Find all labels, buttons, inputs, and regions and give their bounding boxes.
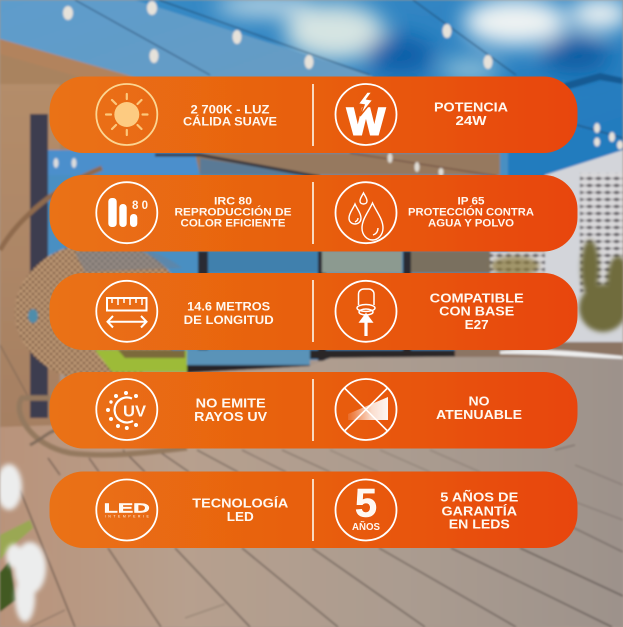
text: colour rendering bbox=[174, 195, 292, 230]
house wall and eave bbox=[0, 39, 497, 444]
text: no UV bbox=[194, 397, 268, 424]
text: ingress protection: PROTECCIÓN CONTRA bbox=[408, 206, 534, 219]
text: E27 compatibility: CON BASE bbox=[439, 304, 515, 319]
text: E27 compatibility: E27 bbox=[465, 317, 489, 332]
icon: E27 bulb base bbox=[336, 281, 396, 342]
icon: not dimmable bbox=[336, 379, 396, 440]
icon: LED: INTEMPERIE bbox=[105, 514, 149, 518]
panel: row 2 bbox=[50, 175, 578, 252]
panel: row 1 bbox=[50, 76, 578, 153]
text: LED technology: TECNOLOGÍA bbox=[192, 496, 288, 511]
sky canopy bbox=[0, 0, 623, 175]
text: colour temperature bbox=[183, 104, 277, 128]
text: colour temperature: CÁLIDA SUAVE bbox=[183, 116, 277, 128]
icon: LED bbox=[96, 480, 157, 540]
text: no UV: NO EMITE bbox=[196, 397, 266, 411]
divider bbox=[312, 280, 314, 342]
text: LED technology bbox=[192, 496, 288, 524]
text: colour temperature: 2 700K - LUZ bbox=[190, 104, 270, 116]
panel: row 4 bbox=[50, 372, 578, 448]
text: not dimmable bbox=[436, 395, 522, 422]
window with blue glass bbox=[30, 114, 508, 418]
text: not dimmable: NO bbox=[468, 395, 490, 409]
text: ingress protection bbox=[408, 195, 534, 230]
icon: 5 year warranty: AÑOS bbox=[352, 520, 380, 533]
text: warranty: 5 AÑOS DE bbox=[440, 490, 519, 505]
text: no UV: RAYOS UV bbox=[194, 410, 268, 424]
string light wires bbox=[75, 0, 623, 138]
text: E27 compatibility bbox=[430, 290, 524, 332]
string light bulbs bbox=[63, 1, 623, 150]
text: LED technology: LED bbox=[227, 510, 254, 524]
divider bbox=[312, 379, 314, 441]
text: colour rendering: IRC 80 bbox=[214, 195, 252, 207]
text: warranty: GARANTÍA bbox=[442, 504, 518, 519]
text: length: 14.6 METROS bbox=[187, 300, 270, 314]
text: power: POTENCIA bbox=[434, 100, 509, 114]
icon: 5 year warranty: 5 bbox=[355, 482, 377, 526]
icon: water drops bbox=[336, 182, 396, 243]
panel: row 5 bbox=[50, 472, 578, 548]
icon: power watt: W bbox=[347, 102, 385, 144]
icon: ruler and arrow bbox=[96, 281, 157, 342]
icon: no UV rays bbox=[96, 379, 157, 440]
hanging wicker chair bbox=[0, 168, 187, 455]
text: colour rendering: REPRODUCCIÓN DE bbox=[174, 206, 292, 219]
text: ingress protection: IP 65 bbox=[458, 195, 484, 207]
divider bbox=[312, 479, 314, 541]
divider bbox=[312, 84, 314, 146]
icon: 5 year warranty bbox=[336, 480, 396, 540]
icon: colour rendering index bars bbox=[96, 182, 157, 243]
text: power: 24W bbox=[456, 113, 487, 128]
panel: row 3 bbox=[50, 273, 578, 350]
text: warranty bbox=[440, 490, 519, 532]
icon: power watt bbox=[336, 84, 396, 145]
text: length: DE LONGITUD bbox=[184, 313, 274, 327]
text: warranty: EN LEDS bbox=[449, 516, 510, 532]
icon: colour rendering index bars: 80 bbox=[132, 200, 148, 212]
white flowers bbox=[0, 464, 46, 622]
icon: no UV rays: UV bbox=[123, 404, 147, 420]
icon: warm sun bbox=[96, 84, 157, 145]
text: power bbox=[434, 100, 509, 128]
icon: LED: LED bbox=[104, 500, 150, 516]
text: E27 compatibility: COMPATIBLE bbox=[430, 290, 524, 305]
text: colour rendering: COLOR EFICIENTE bbox=[180, 218, 286, 230]
divider bbox=[312, 182, 314, 244]
text: length bbox=[184, 300, 274, 327]
text: ingress protection: AGUA Y POLVO bbox=[428, 218, 514, 230]
lattice wall with climbing plants bbox=[490, 150, 623, 359]
text: not dimmable: ATENUABLE bbox=[436, 408, 522, 422]
floor deck bbox=[0, 340, 623, 627]
